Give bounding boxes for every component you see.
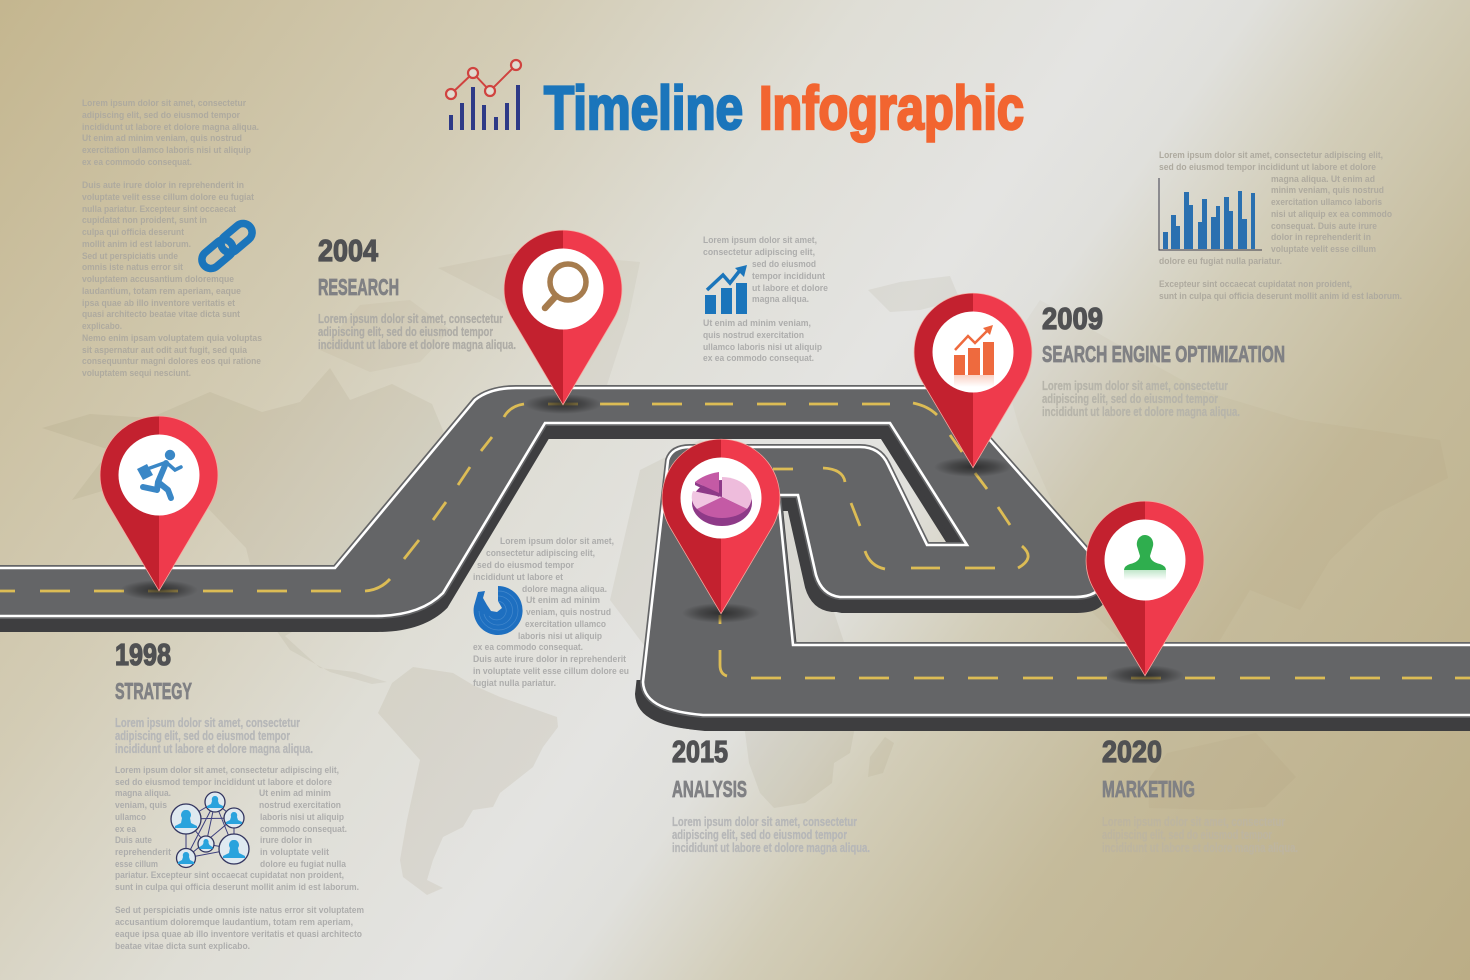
text block: bottom left: Duis aute <box>115 835 152 846</box>
text block: bottom left: veniam, quis <box>115 800 167 811</box>
description: analysis <box>672 814 870 855</box>
text block: top left: Ut enim ad minim veniam, quis nostrud <box>82 133 242 144</box>
text block: top left: ipsa quae ab illo inventore veritatis et <box>82 298 236 309</box>
milestone 2004 <box>318 230 622 414</box>
text block: centre <box>473 536 629 689</box>
text block: top right: sunt in culpa qui officia deserunt mollit anim id est laborum. <box>1159 291 1402 302</box>
description: analysis: adipiscing elit, sed do eiusmod tempor <box>672 827 847 842</box>
text block: top left: Duis aute irure dolor in reprehenderit in <box>82 180 244 191</box>
text block: bottom left: sunt in culpa qui officia deserunt mollit anim id est laborum. <box>115 882 359 893</box>
text block: bottom left: ullamco <box>115 812 146 823</box>
description: research <box>318 311 516 352</box>
text block: bottom left: dolore eu fugiat nulla <box>260 859 347 870</box>
text block: bottom left: accusantium doloremque laudantium, totam rem aperiam, <box>115 917 353 928</box>
heading: research: RESEARCH <box>318 274 399 300</box>
icon: chain link <box>198 220 256 272</box>
text block: bottom left: eaque ipsa quae ab illo inventore veritatis et quasi architecto <box>115 929 362 940</box>
year: 2015: 2015 <box>672 734 728 769</box>
world map background <box>42 252 1448 895</box>
year: 1998: 1998 <box>115 637 171 672</box>
text block: centre: consectetur adipiscing elit, <box>486 548 595 559</box>
map: africa <box>610 440 860 808</box>
text block: top left: Sed ut perspiciatis unde <box>82 251 178 262</box>
text block: top left: culpa qui officia deserunt <box>82 227 185 238</box>
heading: search engine optimization: SEARCH ENGINE OPTIMIZATION <box>1042 341 1285 367</box>
description: seo: adipiscing elit, sed do eiusmod tempor <box>1042 391 1218 406</box>
text block: top left: sit aspernatur aut odit aut fugit, sed quia <box>82 345 248 356</box>
description: strategy: Lorem ipsum dolor sit amet, consectetur <box>115 715 300 730</box>
text block: centre top <box>703 235 828 364</box>
text block: top right <box>1159 150 1402 302</box>
icon: running businessman <box>137 450 181 498</box>
text block: centre: sed do eiusmod tempor <box>477 560 574 571</box>
text block: top left: voluptatem sequi nesciunt. <box>82 368 191 379</box>
text block: top left: voluptate velit esse cillum dolore eu fugiat <box>82 192 255 203</box>
text block: top left: Lorem ipsum dolor sit amet, consectetur <box>82 98 246 109</box>
text block: bottom left: Lorem ipsum dolor sit amet, consectetur adipiscing elit, <box>115 765 339 776</box>
text block: bottom left: sed do eiusmod tempor incididunt ut labore et dolore <box>115 777 332 788</box>
description: seo: Lorem ipsum dolor sit amet, consectetur <box>1042 378 1228 393</box>
text block: centre top: tempor incididunt <box>752 271 826 282</box>
text block: centre top: ex ea commodo consequat. <box>703 353 814 364</box>
text block: top right: voluptate velit esse cillum <box>1271 244 1376 255</box>
milestone 2020 <box>1086 501 1298 855</box>
text block: bottom left: laboris nisi ut aliquip <box>260 812 344 823</box>
map: madagascar <box>868 737 894 777</box>
description: marketing: Lorem ipsum dolor sit amet, consectetur <box>1102 814 1285 829</box>
text block: centre: Ut enim ad minim <box>526 595 600 606</box>
text block: centre top: magna aliqua. <box>752 294 809 305</box>
text block: centre: dolore magna aliqua. <box>522 584 607 595</box>
text block: top right: consequat. Duis aute irure <box>1271 221 1377 232</box>
icon: green person <box>1124 535 1166 580</box>
text block: top right: Lorem ipsum dolor sit amet, consectetur adipiscing elit, <box>1159 150 1383 161</box>
text block: top left: omnis iste natus error sit <box>82 262 184 273</box>
text block: top right: sed do eiusmod tempor incididunt ut labore et dolore <box>1159 162 1376 173</box>
text block: centre: Duis aute irure dolor in reprehenderit <box>473 654 627 665</box>
text block: bottom left: irure dolor in <box>260 835 312 846</box>
year: 2020: 2020 <box>1102 734 1162 769</box>
map: north america <box>42 368 496 684</box>
road edge line <box>0 388 1470 715</box>
icon: people network <box>171 792 249 868</box>
text block: top right: Excepteur sint occaecat cupidatat non proident, <box>1159 279 1352 290</box>
pin: 2015 <box>662 439 780 623</box>
road <box>0 388 1470 728</box>
text block: bottom left: ex ea <box>115 824 137 835</box>
text block: top left: consequuntur magni dolores eos qui ratione <box>82 356 261 367</box>
text block: top left: incididunt ut labore et dolore magna aliqua. <box>82 122 259 133</box>
year: 2004: 2004 <box>318 233 379 268</box>
text block: bottom left <box>115 765 364 952</box>
text block: bottom left: Ut enim ad minim <box>259 788 331 799</box>
description: strategy: adipiscing elit, sed do eiusmod tempor <box>115 728 290 743</box>
map: south america <box>378 667 558 895</box>
text block: top left: cupidatat non proident, sunt in <box>82 215 207 226</box>
heading: analysis: ANALYSIS <box>672 776 747 802</box>
pin: 2004 <box>504 230 622 414</box>
description: marketing: adipiscing elit, sed do eiusmod tempor <box>1102 827 1272 842</box>
text block: centre: exercitation ullamco <box>525 619 606 630</box>
icon: magnifier <box>545 264 586 308</box>
text block: top right: exercitation ullamco laboris <box>1271 197 1382 208</box>
text block: top right: dolore eu fugiat nulla pariatur. <box>1159 256 1282 267</box>
milestone 2009 <box>914 293 1285 477</box>
road surface <box>0 388 1470 715</box>
text block: top right: dolor in reprehenderit in <box>1271 232 1371 243</box>
text block: bottom left: beatae vitae dicta sunt explicabo. <box>115 941 250 952</box>
pin: 2020 <box>1086 501 1204 685</box>
text block: top left: laudantium, totam rem aperiam, eaque <box>82 286 241 297</box>
icon: bar chart top right <box>1159 178 1262 250</box>
road side wall <box>0 400 1470 728</box>
text block: top left: quasi architecto beatae vitae dicta sunt <box>82 309 241 320</box>
description: seo <box>1042 378 1240 419</box>
heading: marketing: MARKETING <box>1102 776 1195 802</box>
icon: blue growth chart <box>705 265 747 314</box>
text block: centre: laboris nisi ut aliquip <box>518 631 602 642</box>
text block: centre: Lorem ipsum dolor sit amet, <box>500 536 614 547</box>
text block: top left: voluptatem accusantium doloremque <box>82 274 234 285</box>
text block: centre top: Lorem ipsum dolor sit amet, <box>703 235 817 246</box>
text block: top left: explicabo. <box>82 321 122 332</box>
map: australia <box>1148 733 1296 810</box>
text block: bottom left: reprehenderit <box>115 847 172 858</box>
title: Infographic <box>759 74 1024 142</box>
text block: bottom left: nostrud exercitation <box>259 800 341 811</box>
description: analysis: Lorem ipsum dolor sit amet, consectetur <box>672 814 857 829</box>
description: research: incididunt ut labore et dolore magna aliqua. <box>318 337 516 352</box>
text block: top left: nulla pariatur. Excepteur sint occaecat <box>82 204 237 215</box>
text block: top left: mollit anim id est laborum. <box>82 239 191 250</box>
road centre dashes <box>0 403 1470 678</box>
text block: top left: adipiscing elit, sed do eiusmod tempor <box>82 110 240 121</box>
description: strategy: incididunt ut labore et dolore magna aliqua. <box>115 741 313 756</box>
year: 2009: 2009 <box>1042 301 1103 336</box>
icon: pie chart <box>692 472 752 526</box>
map: asia <box>1000 300 1448 690</box>
map: europe <box>868 276 960 312</box>
title <box>544 74 1024 142</box>
text block: centre top: consectetur adipiscing elit, <box>703 247 815 258</box>
description: marketing: incididunt ut labore et dolore magna aliqua. <box>1102 840 1298 855</box>
text block: bottom left: esse cillum <box>115 859 158 870</box>
text block: top left <box>82 98 262 379</box>
pin: 1998 <box>100 416 218 600</box>
description: marketing <box>1102 814 1298 855</box>
icon: radial chart <box>474 586 523 635</box>
text block: centre: fugiat nulla pariatur. <box>473 678 556 689</box>
description: research: adipiscing elit, sed do eiusmod tempor <box>318 324 493 339</box>
text block: centre top: quis nostrud exercitation <box>703 330 804 341</box>
map: arctic islands <box>320 300 450 372</box>
text block: centre top: ut labore et dolore <box>752 283 828 294</box>
milestone 1998 <box>100 416 313 756</box>
text block: centre: ex ea commodo consequat. <box>473 642 583 653</box>
text block: centre: incididunt ut labore et <box>473 572 564 583</box>
text block: centre top: ullamco laboris nisi ut aliquip <box>703 342 822 353</box>
text block: centre: veniam, quis nostrud <box>526 607 611 618</box>
description: research: Lorem ipsum dolor sit amet, consectetur <box>318 311 503 326</box>
text block: bottom left: in voluptate velit <box>260 847 330 858</box>
icon: orange growth chart <box>954 325 994 387</box>
text block: bottom left: pariatur. Excepteur sint occaecat cupidatat non proident, <box>115 870 344 881</box>
pin: 2009 <box>914 293 1032 477</box>
text block: top left: Nemo enim ipsam voluptatem quia voluptas <box>82 333 262 344</box>
text block: bottom left: magna aliqua. <box>115 788 171 799</box>
text block: bottom left: Sed ut perspiciatis unde omnis iste natus error sit voluptatem <box>115 905 364 916</box>
description: strategy <box>115 715 313 756</box>
title icon: line and bar chart <box>446 60 521 130</box>
title: Timeline <box>544 74 743 142</box>
text block: centre top: Ut enim ad minim veniam, <box>703 318 811 329</box>
text block: centre top: sed do eiusmod <box>752 259 816 270</box>
text block: top right: minim veniam, quis nostrud <box>1271 185 1384 196</box>
text block: top right: magna aliqua. Ut enim ad <box>1271 174 1375 185</box>
heading: strategy: STRATEGY <box>115 678 192 704</box>
map: greenland <box>438 252 640 388</box>
text block: centre: in voluptate velit esse cillum dolore eu <box>473 666 629 677</box>
description: seo: incididunt ut labore et dolore magna aliqua. <box>1042 404 1240 419</box>
text block: top right: nisi ut aliquip ex ea commodo <box>1271 209 1392 220</box>
text block: top left: exercitation ullamco laboris nisi ut aliquip <box>82 145 251 156</box>
milestone 2015 <box>662 439 870 855</box>
description: analysis: incididunt ut labore et dolore magna aliqua. <box>672 840 870 855</box>
text block: bottom left: commodo consequat. <box>260 824 347 835</box>
text block: top left: ex ea commodo consequat. <box>82 157 192 168</box>
